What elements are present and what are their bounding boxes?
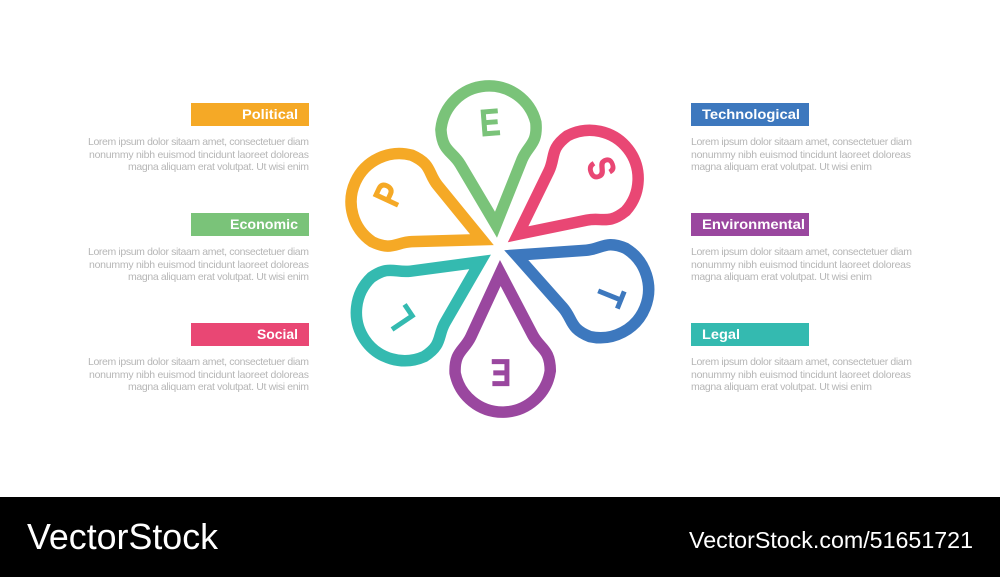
text block: legal description: Lorem ipsum dolor sitaam amet, consectetuer diam [691, 356, 912, 368]
text block: legal description: nonummy nibh euismod tincidunt laoreet doloreas [691, 369, 911, 381]
label: Economic: Economic [230, 216, 298, 232]
petal: S social [489, 111, 657, 272]
label: Technological [691, 103, 809, 126]
petal: E environmental [453, 272, 551, 413]
text block: social description: nonummy nibh euismod tincidunt laoreet doloreas [89, 369, 309, 381]
petal: E environmental: E [491, 351, 511, 393]
petal: S social: S [578, 152, 624, 185]
text block: environmental description: magna aliquam erat volutpat. Ut wisi enim [691, 271, 872, 283]
text block: legal description: magna aliquam erat volutpat. Ut wisi enim [691, 381, 872, 393]
label: Legal: Legal [702, 326, 740, 342]
panel: environmental [691, 213, 912, 283]
chart: PESTLE petal flower [336, 82, 663, 413]
text block: environmental description: nonummy nibh euismod tincidunt laoreet doloreas [691, 259, 911, 271]
petal: L legal: L [379, 298, 424, 337]
text block: social description: magna aliquam erat volutpat. Ut wisi enim [128, 381, 309, 393]
label: Economic [191, 213, 309, 236]
panel: political [88, 103, 309, 173]
petal: E economic: E [478, 102, 502, 145]
label: Political [191, 103, 309, 126]
label: Political: Political [242, 106, 298, 122]
label: Environmental [691, 213, 809, 236]
label: Legal [691, 323, 809, 346]
text block: economic description: magna aliquam erat volutpat. Ut wisi enim [128, 271, 309, 283]
text block: environmental description: Lorem ipsum dolor sitaam amet, consectetuer diam [691, 246, 912, 258]
label: Environmental: Environmental [702, 216, 805, 232]
text block: economic description [88, 246, 309, 283]
text block: social description [88, 356, 309, 393]
footer image id: VectorStock.com/51651721 [689, 527, 973, 553]
text block: economic description: Lorem ipsum dolor sitaam amet, consectetuer diam [88, 246, 309, 258]
label: Social [191, 323, 309, 346]
text block: technological description: magna aliquam erat volutpat. Ut wisi enim [691, 161, 872, 173]
text block: legal description [691, 356, 912, 393]
footer logo: VectorStock [27, 516, 219, 557]
text block: technological description [691, 136, 912, 173]
label: Technological: Technological [702, 106, 800, 122]
text block: political description [88, 136, 309, 173]
text block: technological description: nonummy nibh euismod tincidunt laoreet doloreas [691, 149, 911, 161]
panel: economic [88, 213, 309, 283]
petal: P political: P [366, 177, 413, 213]
footer band [0, 497, 1000, 577]
petal: P political [336, 138, 502, 283]
text block: environmental description [691, 246, 912, 283]
panel: technological [691, 103, 912, 173]
text block: political description: nonummy nibh euismod tincidunt laoreet doloreas [89, 149, 309, 161]
text block: economic description: nonummy nibh euismod tincidunt laoreet doloreas [89, 259, 309, 271]
text block: political description: Lorem ipsum dolor sitaam amet, consectetuer diam [88, 136, 309, 148]
petal: L legal [338, 222, 507, 379]
panel: legal [691, 323, 912, 393]
petal: T technological [498, 211, 663, 352]
text block: social description: Lorem ipsum dolor sitaam amet, consectetuer diam [88, 356, 309, 368]
text block: political description: magna aliquam erat volutpat. Ut wisi enim [128, 161, 309, 173]
text block: technological description: Lorem ipsum dolor sitaam amet, consectetuer diam [691, 136, 912, 148]
panel: social [88, 323, 309, 393]
petal: E economic [438, 82, 543, 228]
petal: T technological: T [587, 279, 633, 312]
label: Social: Social [257, 326, 298, 342]
